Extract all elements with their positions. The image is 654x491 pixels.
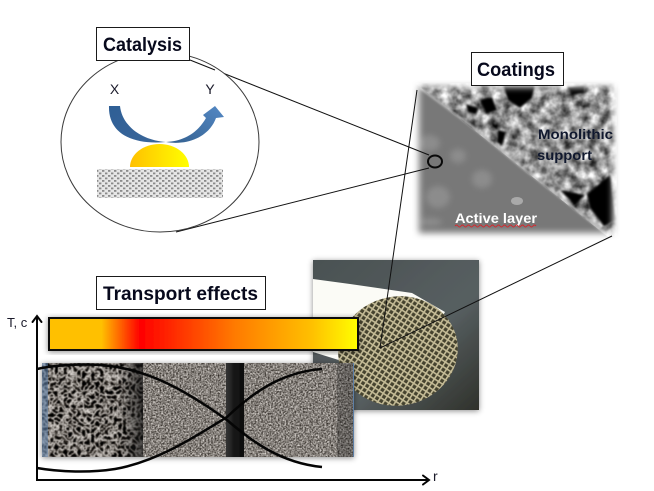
- box: catalysis heading: [96, 28, 190, 60]
- colour bar: temperature gradient: [49, 318, 358, 350]
- monolithic support texture: [415, 83, 617, 237]
- shaded side face: [337, 363, 354, 457]
- box: coatings heading: Coatings: [477, 60, 555, 81]
- axes: [32, 316, 429, 484]
- label: X: X: [110, 81, 120, 97]
- particle on active layer: [511, 197, 523, 205]
- open cell foam section: [42, 363, 143, 457]
- panel: catalysis circle: [61, 52, 259, 232]
- box: transport effects heading: Transport effects: [103, 284, 258, 305]
- panel: coatings electron micrograph: [412, 80, 620, 240]
- chart: temperature and concentration profiles: [32, 316, 429, 484]
- label: active layer: Active layer: [455, 210, 538, 226]
- label: Y: Y: [205, 81, 215, 97]
- label: monolithic support: support: [537, 147, 592, 163]
- bright edge of the interface: [420, 88, 606, 234]
- monolith white body: [313, 279, 445, 360]
- axis label: r: r: [433, 468, 438, 484]
- curve: falling profile: [37, 365, 322, 467]
- marker: coating spot circle: [428, 156, 442, 168]
- monolith end face: [338, 296, 458, 406]
- active layer surface: [412, 80, 620, 240]
- second fine foam section: [244, 363, 354, 457]
- box: catalysis heading: Catalysis: [103, 35, 182, 56]
- icon: reaction arrow: [109, 106, 224, 143]
- connector: line doubling the circle edge at the heading: [190, 60, 215, 70]
- dark gap: [226, 363, 244, 457]
- active layer bumps: [418, 135, 492, 226]
- connector lines: monolith to coatings image: [380, 90, 612, 348]
- icon: porous support: [97, 169, 223, 198]
- fine foam section: [143, 363, 226, 457]
- panel: monolith photograph: [313, 260, 479, 417]
- connector lines: catalysis circle to coating spot: [176, 60, 429, 232]
- curve: rising profile: [37, 369, 322, 472]
- icon: catalyst particle: [130, 144, 189, 167]
- axis label: T, c: T, c: [7, 315, 28, 330]
- panel: foam photograph: [42, 363, 354, 457]
- box: transport effects heading: [96, 276, 266, 310]
- box: coatings heading: [472, 52, 564, 86]
- label: monolithic support: Monolithic: [538, 126, 613, 142]
